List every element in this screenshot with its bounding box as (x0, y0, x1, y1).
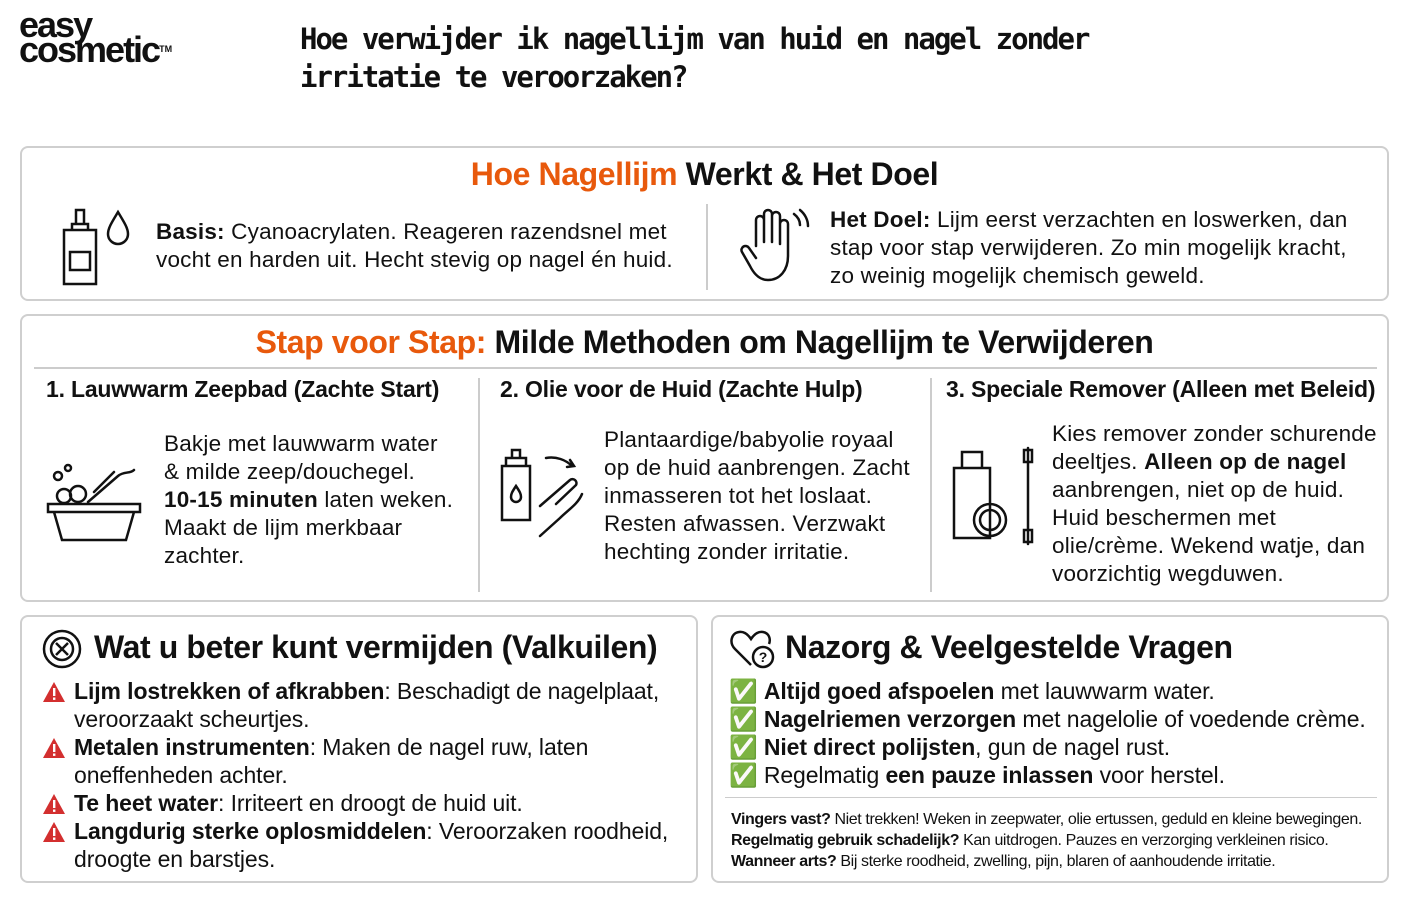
aftercare list (729, 678, 1366, 788)
text: basis (156, 219, 673, 272)
step 2 text: hechting zonder irritatie. (604, 539, 849, 564)
FAQ: Wanneer arts? Bij sterke roodheid, zwelling, pijn, blaren of aanhoudende irritatie. (731, 853, 1275, 870)
heading: Stap voor Stap: Milde Methoden om Nagellijm te Verwijderen (256, 324, 1153, 360)
pitfalls list: Te heet water: Irriteert en droogt de huid uit. (74, 790, 523, 816)
step 2 text: Resten afwassen. Verzwakt (604, 511, 885, 536)
aftercare list: ✅ Nagelriemen verzorgen met nagelolie of voedende crème. (729, 706, 1366, 732)
pitfalls list: oneffenheden achter. (74, 762, 288, 788)
title (300, 22, 1090, 94)
aftercare heading: Nazorg & Veelgestelde Vragen (785, 629, 1233, 665)
FAQ: Vingers vast? Niet trekken! Weken in zeepwater, olie ertussen, geduld en kleine bewegingen. (731, 811, 1362, 828)
step 1 text: 10-15 minuten laten weken. (164, 487, 453, 512)
pitfalls list (43, 678, 668, 872)
step 2 text: op de huid aanbrengen. Zacht (604, 455, 910, 480)
step 3 text: olie/crème. Wekend watje, dan (1052, 533, 1365, 558)
step 3 (946, 376, 1377, 586)
step 1 text (164, 431, 453, 568)
aftercare list: ✅ Niet direct polijsten, gun de nagel rust. (729, 734, 1170, 760)
step 2 text: inmasseren tot het loslaat. (604, 483, 872, 508)
step 3 text (1052, 421, 1377, 586)
step 2 text (604, 427, 910, 564)
step 1 text: & milde zeep/douchegel. (164, 459, 415, 484)
icon: glue bottle (62, 208, 130, 286)
step 1 text: Maakt de lijm merkbaar (164, 515, 402, 540)
pitfalls list: Langdurig sterke oplosmiddelen: Veroorzaken roodheid, (74, 818, 668, 844)
step 3 heading: 3. Speciale Remover (Alleen met Beleid) (946, 376, 1375, 402)
panel: aftercare & FAQ (711, 615, 1389, 883)
step 1 text: zachter. (164, 543, 244, 568)
pitfalls heading: Wat u beter kunt vermijden (Valkuilen) (94, 629, 657, 665)
step 3 text: Huid beschermen met (1052, 505, 1276, 530)
logo: cosmeticTM (19, 29, 172, 70)
pitfalls list: veroorzaakt scheurtjes. (74, 706, 309, 732)
text: doel: Het Doel: Lijm eerst verzachten en loswerken, dan (830, 207, 1348, 232)
step 1 heading: 1. Lauwwarm Zeepbad (Zachte Start) (46, 376, 439, 402)
step 2 (500, 376, 910, 564)
step 3 text: aanbrengen, niet op de huid. (1052, 477, 1344, 502)
icon: hand (740, 208, 810, 282)
logo (19, 4, 172, 70)
icon: heart question: ? (759, 649, 767, 665)
text: doel: zo weinig mogelijk chemisch geweld. (830, 263, 1205, 288)
icon: soap bath (46, 464, 142, 542)
step 1 (46, 376, 453, 568)
step 2 heading: 2. Olie voor de Huid (Zachte Hulp) (500, 376, 863, 402)
pitfalls list: Lijm lostrekken of afkrabben: Beschadigt de nagelplaat, (74, 678, 659, 704)
pitfalls list: Metalen instrumenten: Maken de nagel ruw, laten (74, 734, 588, 760)
FAQ (731, 811, 1362, 870)
text: basis: Basis: Cyanoacrylaten. Reageren razendsnel met (156, 219, 667, 244)
panel: step by step (20, 314, 1389, 602)
text: basis: vocht en harden uit. Hecht stevig op nagel én huid. (156, 247, 673, 272)
logo: easy (19, 4, 91, 45)
step 3 text: Kies remover zonder schurende (1052, 421, 1377, 446)
text: doel (830, 207, 1348, 288)
aftercare list: ✅ Regelmatig een pauze inlassen voor herstel. (729, 762, 1225, 788)
text: doel: stap voor stap verwijderen. Zo min mogelijk kracht, (830, 235, 1347, 260)
step 3 text: voorzichtig wegduwen. (1052, 561, 1284, 586)
aftercare list: ✅ Altijd goed afspoelen met lauwwarm water. (729, 678, 1215, 704)
heading: Hoe Nagellijm Werkt & Het Doel (471, 156, 938, 192)
icon: x circle (42, 630, 82, 668)
panel: how glue works (20, 146, 1389, 301)
FAQ: Regelmatig gebruik schadelijk? Kan uitdrogen. Pauzes en verzorging verkleinen risico. (731, 832, 1328, 849)
title: Hoe verwijder ik nagellijm van huid en nagel zonder (300, 22, 1088, 56)
panel: pitfalls (20, 615, 698, 883)
step 3 text: deeltjes. Alleen op de nagel (1052, 449, 1346, 474)
step 1 text: Bakje met lauwwarm water (164, 431, 438, 456)
icon: heart question (730, 630, 774, 668)
step 2 text: Plantaardige/babyolie royaal (604, 427, 894, 452)
title: irritatie te veroorzaken? (300, 60, 686, 94)
icon: oil & hand (500, 448, 584, 538)
icon: remover bottle (952, 446, 1034, 546)
pitfalls list: droogte en barstjes. (74, 846, 275, 872)
